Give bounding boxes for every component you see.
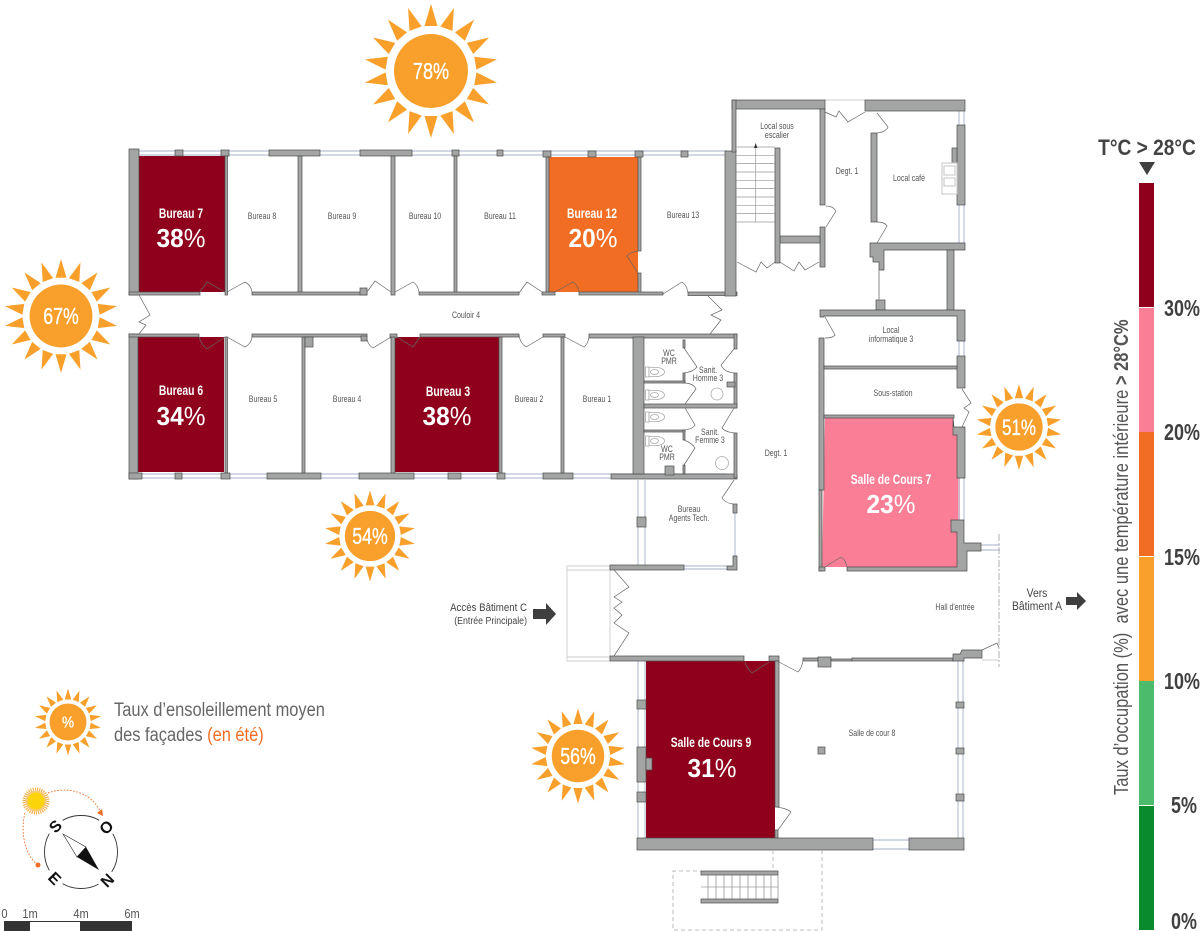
scale bar: 4m <box>73 906 89 921</box>
room labels: WC <box>663 348 675 358</box>
room labels: Bureau 5 <box>249 394 278 404</box>
icon: legend sun: % <box>62 715 74 732</box>
room labels: Bureau <box>678 504 700 514</box>
compass with sun path: S <box>46 817 66 837</box>
sun: west facade 67% <box>4 259 118 373</box>
scale segments <box>1139 183 1154 930</box>
room labels: Local <box>883 325 900 335</box>
compass with sun path: N <box>98 871 118 891</box>
room labels: Degt. 1 <box>836 166 859 176</box>
room labels: Hall d'entrée <box>935 602 975 612</box>
room labels: Femme 3 <box>695 435 725 445</box>
scale labels: 5% <box>1171 793 1197 819</box>
toilets <box>646 367 728 470</box>
icon: legend sun <box>34 688 102 756</box>
colour scale <box>1098 136 1200 931</box>
compass with sun path: E <box>44 869 64 889</box>
scale labels: 20% <box>1164 420 1200 446</box>
room labels: Salle de cour 8 <box>849 728 896 738</box>
compass with sun path <box>23 789 118 891</box>
room labels: informatique 3 <box>869 334 914 344</box>
room: Bureau 12: Bureau 12 <box>567 205 617 221</box>
legend text: des façades <box>114 724 207 745</box>
room: Salle de Cours 7: Salle de Cours 7 <box>851 471 931 487</box>
room labels: PMR <box>659 452 675 462</box>
room labels: Bureau 8 <box>248 211 277 221</box>
scale labels: 15% <box>1164 545 1200 571</box>
outside stair with dashed outline <box>673 850 822 930</box>
hall east boundary <box>998 534 1000 667</box>
staircase: interior <box>736 147 775 222</box>
sun: salle 9 facade 56% <box>530 708 626 804</box>
doors <box>139 111 999 830</box>
room labels: Local sous <box>760 121 794 131</box>
legend: sunshine rate <box>34 688 325 756</box>
heading: T above 28: T°C > 28°C <box>1098 136 1196 160</box>
room: Bureau 3 <box>423 383 471 431</box>
room: Bureau 6: Bureau 6 <box>159 382 203 398</box>
room: Salle de Cours 9: Salle de Cours 9 <box>671 734 751 750</box>
panel: floor plan <box>129 100 1000 930</box>
room labels: Sanit. <box>699 365 717 375</box>
windows and glazing lines <box>139 111 1000 849</box>
room: Bureau 6: 34% <box>157 402 205 431</box>
compass with sun path: O <box>97 818 117 838</box>
legend text: (en été) <box>207 724 264 745</box>
scale bar: 0 <box>1 906 8 921</box>
axis title: Taux d’occupation (%) avec une température intérieure > 28°C% <box>1109 319 1132 795</box>
room labels: Bureau 4 <box>333 394 362 404</box>
room: Bureau 3: 38% <box>423 402 471 431</box>
room: Bureau 6 <box>157 382 205 431</box>
room labels: Agents Tech. <box>669 513 709 523</box>
room labels: Sous-station <box>874 388 912 398</box>
room: Bureau 12 <box>567 205 617 253</box>
room labels: Homme 3 <box>693 373 724 383</box>
room labels: Local café <box>893 173 925 183</box>
sun: salle 9 facade 56%: 56% <box>560 744 596 770</box>
sun: east facade 51%: 51% <box>1002 416 1036 441</box>
room labels <box>248 121 975 738</box>
room labels: Bureau 1 <box>583 394 612 404</box>
sun: east facade 51% <box>976 384 1062 470</box>
room: Bureau 12: 20% <box>569 224 617 253</box>
room labels: WC <box>661 444 673 454</box>
scale bar: 1m <box>22 906 38 921</box>
sun: south facade 54% <box>324 490 416 582</box>
arrow label: access building C: Accès Bâtiment C <box>450 603 527 614</box>
room labels: Bureau 13 <box>667 210 700 220</box>
scale bar: 6m <box>124 906 140 921</box>
room labels: Bureau 2 <box>515 394 544 404</box>
sun: north facade 78% <box>364 4 498 138</box>
scale labels <box>1164 296 1200 931</box>
scale labels: 30% <box>1164 296 1200 322</box>
room: Bureau 7: Bureau 7 <box>159 205 203 221</box>
arrow label: access building C: (Entrée Principale) <box>454 614 527 626</box>
room labels: Bureau 10 <box>409 211 442 221</box>
arrow label: to building A <box>1012 588 1086 613</box>
kitchen sink <box>942 163 957 194</box>
room labels: Couloir 4 <box>452 310 480 320</box>
scale bar <box>1 906 140 931</box>
room: Bureau 7 <box>157 205 205 253</box>
room labels: Sanit. <box>701 427 719 437</box>
marker triangle <box>1139 162 1155 175</box>
room labels: Degt. 1 <box>765 448 788 458</box>
entrance canopy outline <box>567 566 610 661</box>
room: Salle de Cours 7 <box>851 471 931 519</box>
room: Salle de Cours 9 <box>671 734 751 783</box>
scale labels: 10% <box>1164 669 1200 695</box>
room: Salle de Cours 9: 31% <box>688 754 736 783</box>
arrow label: access building C <box>450 603 556 626</box>
arrow label: to building A: Bâtiment A <box>1012 601 1063 613</box>
legend text: Taux d’ensoleillement moyen <box>114 699 325 720</box>
sun: west facade 67%: 67% <box>43 304 79 330</box>
room labels: escalier <box>765 130 789 140</box>
room labels: Bureau 11 <box>484 211 516 221</box>
room: Salle de Cours 7: 23% <box>867 490 915 519</box>
thin partition between local and corridor <box>878 270 880 300</box>
arrow label: to building A: Vers <box>1027 588 1048 600</box>
sun: north facade 78%: 78% <box>413 59 449 85</box>
sun: south facade 54%: 54% <box>352 524 388 550</box>
room fills: occupancy colours <box>138 156 960 838</box>
room: Bureau 7: 38% <box>157 224 205 253</box>
walls <box>129 100 982 850</box>
room labels: Bureau 9 <box>328 211 357 221</box>
room: Bureau 3: Bureau 3 <box>426 383 470 399</box>
room labels: PMR <box>661 356 677 366</box>
